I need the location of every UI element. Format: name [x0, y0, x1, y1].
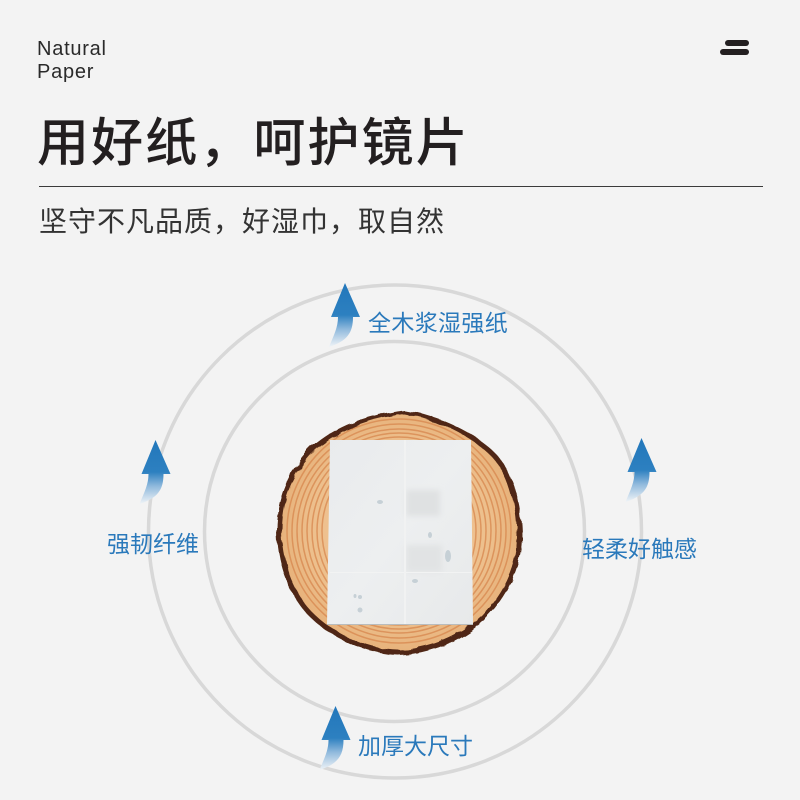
label: bottom: 加厚大尺寸 — [358, 733, 473, 759]
subtitle: 坚守不凡品质，好湿巾，取自然 — [39, 206, 445, 237]
divider rule — [39, 186, 763, 187]
label: left: 强韧纤维 — [107, 531, 199, 557]
wood slice — [277, 410, 522, 655]
arrow: left — [140, 440, 170, 504]
title: 用好纸，呵护镜片 — [37, 115, 470, 173]
growth rings — [287, 419, 511, 643]
inner ring — [204, 342, 584, 722]
brand text: Natural Paper: Natural — [37, 38, 107, 60]
arrow: bottom — [320, 706, 350, 770]
icon: menu bars — [720, 40, 749, 55]
arrow: top — [329, 283, 360, 347]
brand text: Natural Paper — [37, 38, 107, 83]
label: right: 轻柔好触感 — [582, 536, 697, 562]
brand text: Natural Paper: Paper — [37, 61, 94, 83]
label: top: 全木浆湿强纸 — [368, 310, 508, 336]
outer ring — [148, 285, 642, 778]
tissue sheet — [327, 440, 473, 624]
arrow: right — [626, 438, 656, 502]
